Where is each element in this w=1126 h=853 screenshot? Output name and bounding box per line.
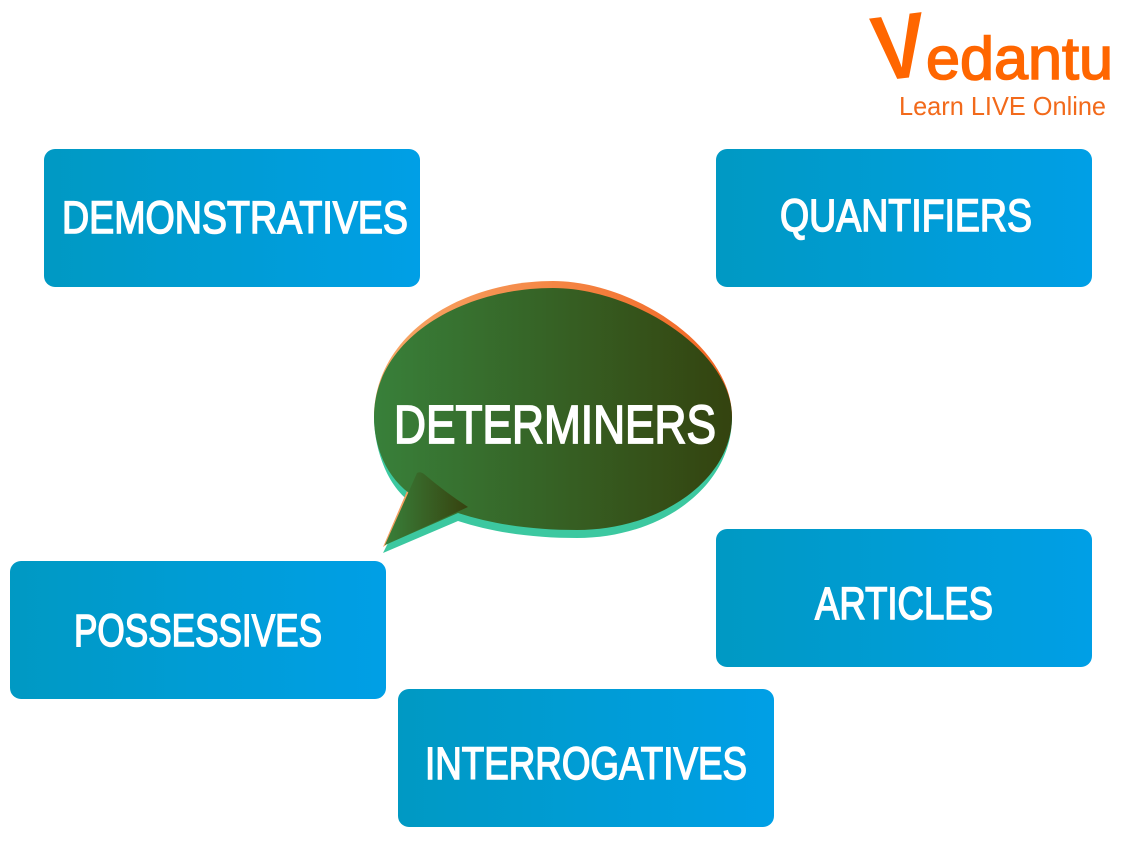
box: articles: ARTICLES [815,578,993,629]
logo wordmark [866,0,1113,101]
bubble teal shadow [374,417,732,553]
box: possessives: POSSESSIVES [74,605,322,656]
logo tagline: Learn LIVE Online [899,91,1106,121]
box: articles [716,529,1092,667]
bubble orange rim [374,281,732,417]
box: quantifiers: QUANTIFIERS [780,190,1032,241]
logo: Vedantu [866,0,1113,121]
box: demonstratives [44,149,420,287]
box: interrogatives: INTERROGATIVES [425,738,747,789]
bubble body [374,288,732,545]
box: possessives [10,561,386,699]
speech bubble: determiners [374,281,732,553]
logo wordmark: edantu [926,25,1113,92]
bubble tail [385,472,468,545]
tail orange edge [383,491,412,547]
box: interrogatives [398,689,774,827]
box: quantifiers [716,149,1092,287]
box: demonstratives: DEMONSTRATIVES [62,192,408,243]
bubble label: DETERMINERS [394,395,716,455]
